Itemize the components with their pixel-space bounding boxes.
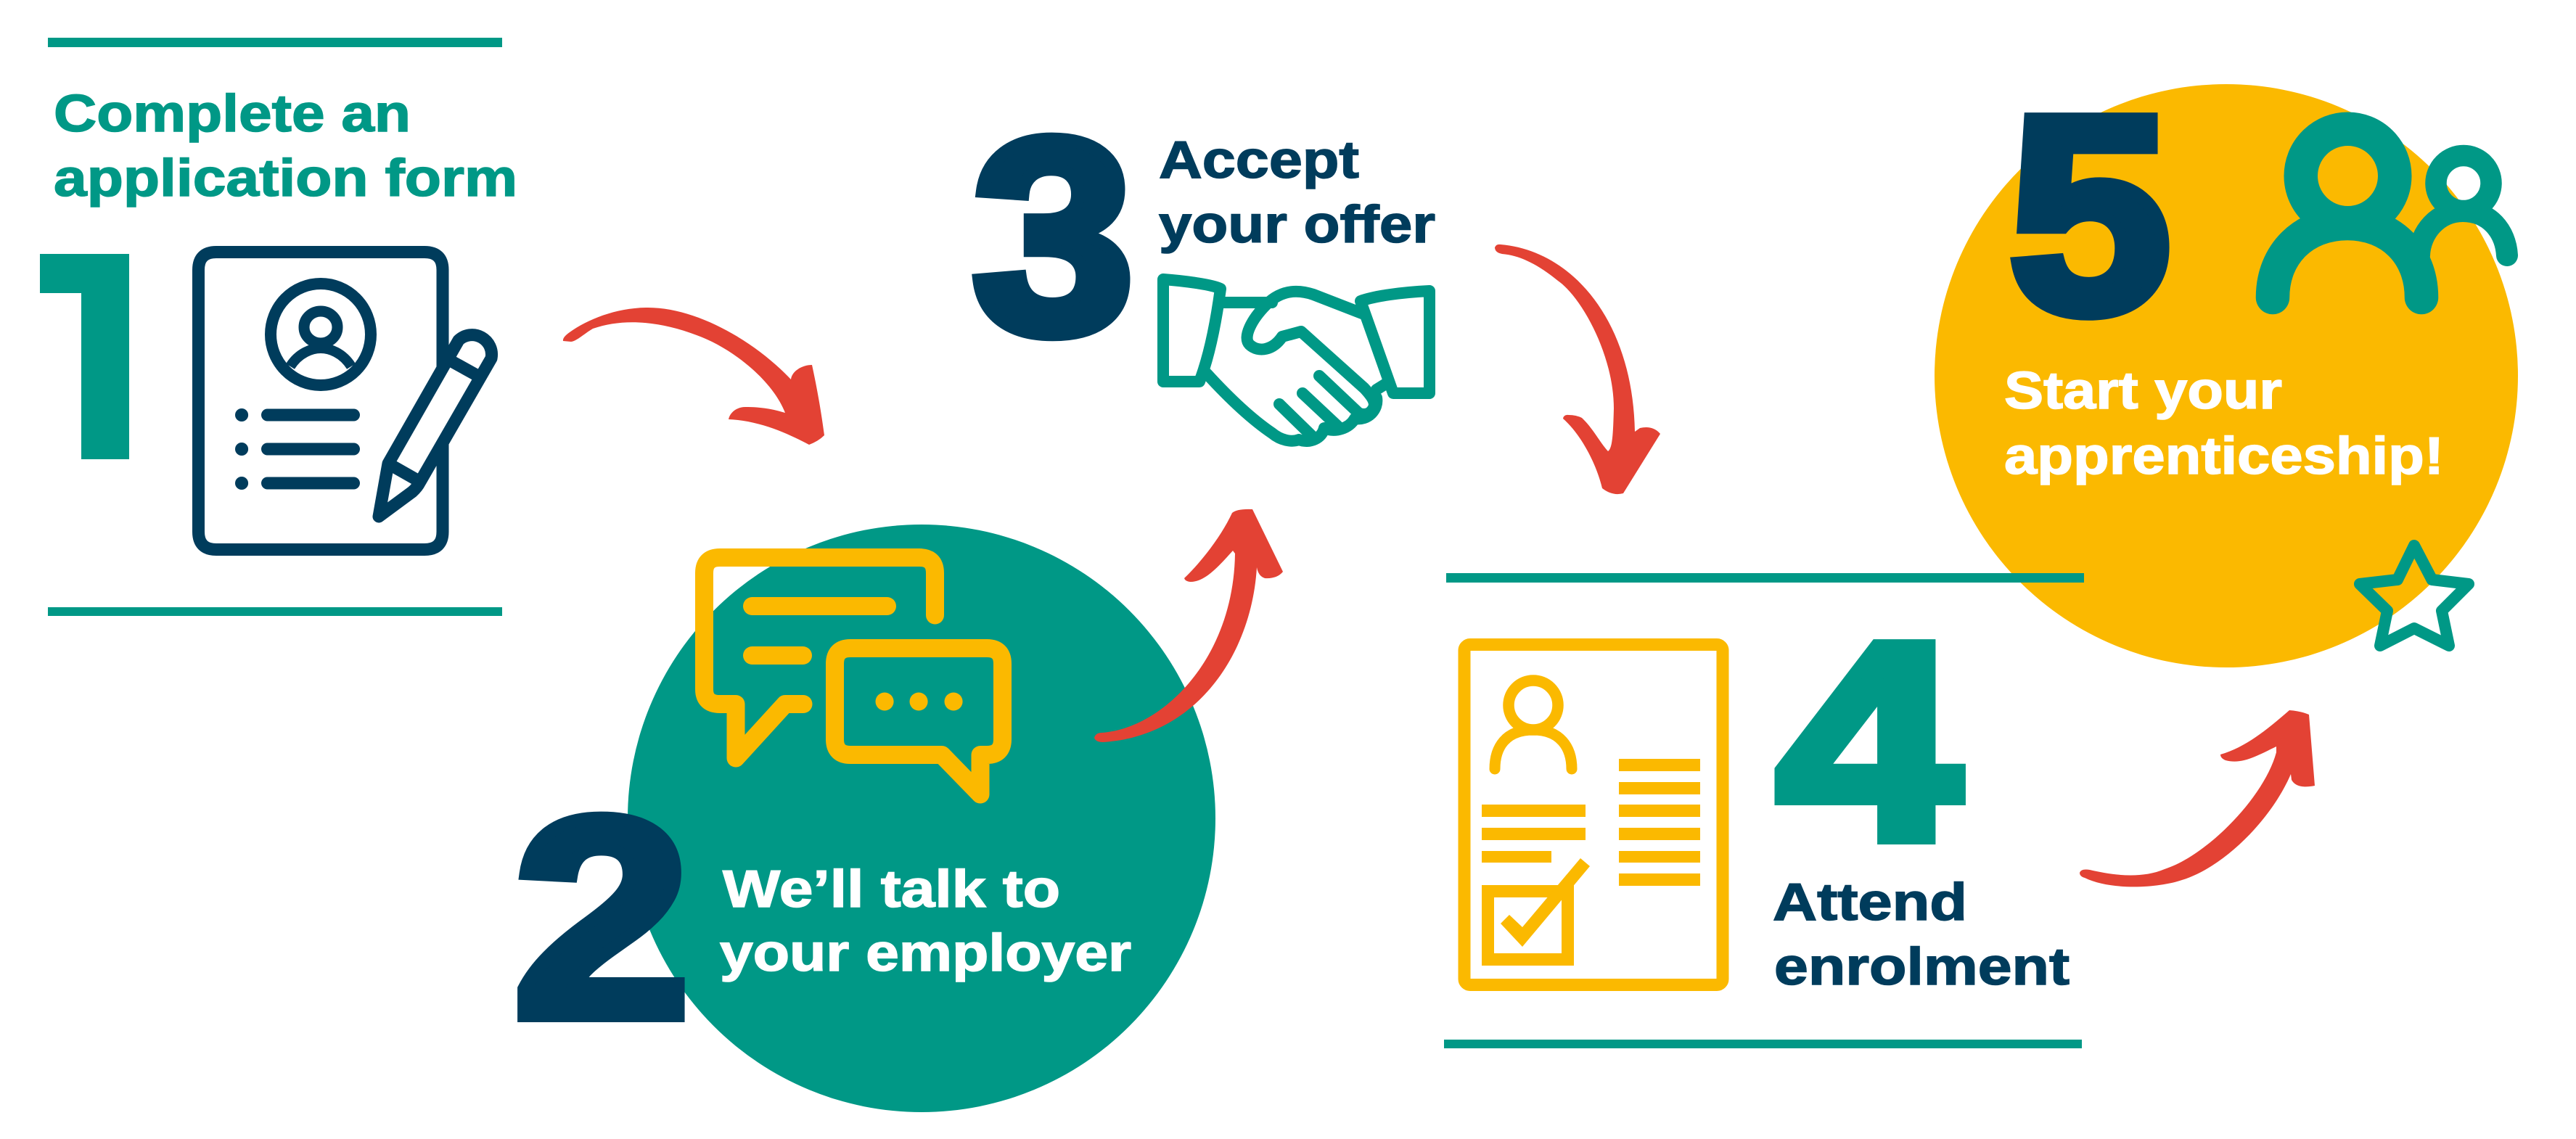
yellow circle (1935, 84, 2518, 667)
number 5: 5 (2009, 59, 2170, 371)
panel: step 2 (514, 525, 1215, 1112)
panel: step 5 (1935, 59, 2518, 667)
text: we'll talk to your employer: your employer (720, 924, 1131, 982)
text: start your apprenticeship: apprenticeship! (2004, 427, 2444, 485)
panel: step 1 (17, 38, 517, 616)
number 4: 4 (1777, 586, 1962, 897)
icon: application form with pencil (199, 252, 492, 550)
panel: step 4 (1444, 573, 2084, 1048)
text: attend enrolment: enrolment (1774, 938, 2070, 996)
heading: complete an application form: application form (54, 149, 517, 207)
number 3: 3 (973, 82, 1133, 390)
text: we'll talk to your employer: We’ll talk to (723, 860, 1060, 918)
panel: step 3 (973, 82, 1435, 441)
bottom rule (1444, 1040, 2082, 1048)
number 1 (40, 254, 129, 459)
arrow: step 4 to step 5 (2080, 710, 2315, 887)
arrow: step 2 to step 3 (1094, 509, 1283, 742)
arrow: step 3 to step 4 (1495, 244, 1660, 494)
teal circle (628, 525, 1215, 1112)
text: accept your offer (1159, 131, 1435, 254)
text: attend enrolment (1773, 873, 2070, 996)
text: start your apprenticeship: Start your (2004, 362, 2282, 420)
icon: speech bubbles (704, 557, 1003, 794)
number 1: 1 (17, 203, 179, 511)
text: attend enrolment: Attend (1773, 873, 1967, 932)
icon: handshake (1163, 279, 1429, 441)
icon: star (2360, 546, 2469, 646)
top rule (1446, 573, 2084, 583)
icon: enrolment form (1464, 644, 1723, 985)
text: accept your offer: your offer (1159, 196, 1435, 254)
top rule (48, 38, 502, 47)
bottom rule (48, 607, 502, 616)
text: accept your offer: Accept (1159, 131, 1359, 189)
number 2: 2 (514, 760, 690, 1076)
text: we'll talk to your employer (720, 860, 1131, 982)
icon: two people (2273, 129, 2507, 297)
heading: complete an application form (54, 85, 517, 207)
arrow: step 1 to step 2 (563, 308, 824, 445)
heading: complete an application form: Complete an (54, 85, 411, 143)
text: start your apprenticeship (2004, 362, 2444, 485)
